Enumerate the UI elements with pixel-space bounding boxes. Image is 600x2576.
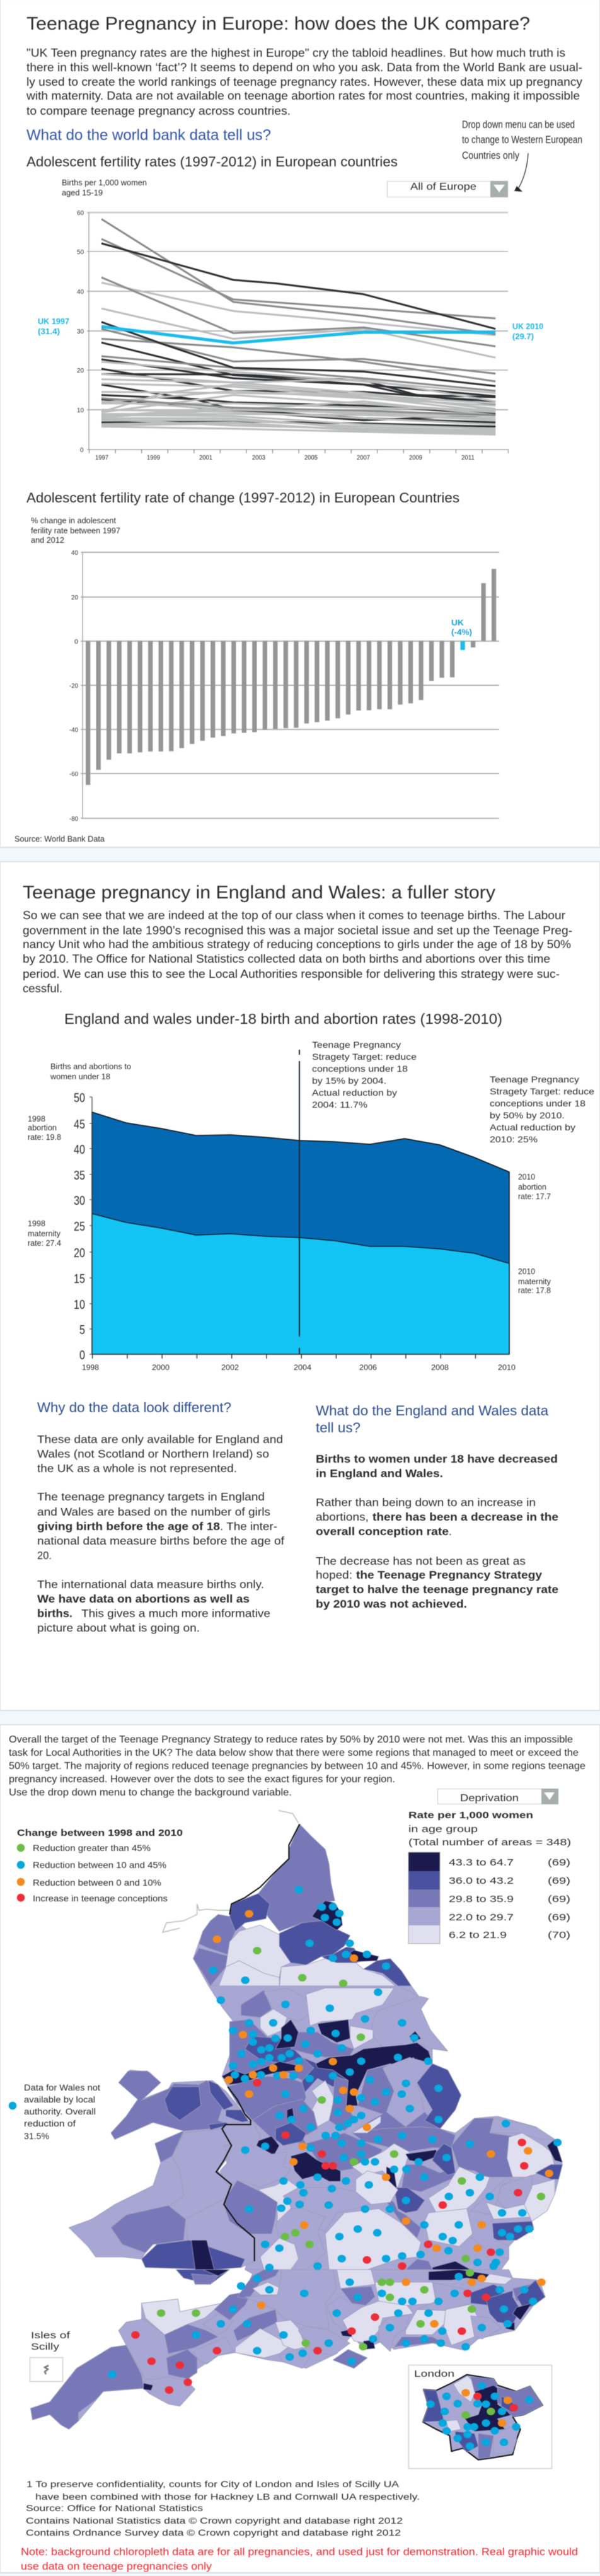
heading: world bank: What do the world bank data tell us? (26, 127, 271, 144)
callout: 2010 target: Actual reduction by (490, 1122, 575, 1132)
callout: 2010 target: by 50% by 2010. (490, 1110, 565, 1120)
panel: England and Wales (0, 861, 600, 2573)
dropdown: All of Europe (387, 181, 508, 197)
paragraphs: We have data on abortions as well as (37, 1593, 250, 1605)
legend: rate per 1,000 women: (69) (548, 1857, 570, 1868)
line chart: fertility rates (38, 178, 543, 461)
heading: line chart: Adolescent fertility rates (1997-2012) in European countries (26, 154, 398, 170)
callout: 2010 target: conceptions under 18 (490, 1098, 586, 1108)
column: what do the England and Wales data tell us (316, 1403, 558, 1610)
intro text: So we can see that we are indeed at the top of our class when it comes to teenage births. The Labour (23, 909, 565, 922)
paragraphs: in England and Wales. (316, 1467, 443, 1480)
label: UK 1997 (38, 316, 69, 336)
footnotes: Source: Office for National Statistics (26, 2503, 203, 2513)
footnotes: Contains National Statistics data © Crown copyright and database right 2012 (26, 2515, 403, 2526)
bar chart: rate of change: 40 (71, 550, 78, 557)
paragraphs: the UK as a whole is not represented. (37, 1462, 237, 1475)
legend: rate per 1,000 women: (69) (548, 1894, 570, 1905)
legend: rate per 1,000 women: (70) (548, 1930, 570, 1941)
area: maternity (92, 1214, 509, 1354)
intro text (26, 47, 582, 117)
bar chart: rate of change (31, 516, 499, 823)
bar chart: rate of change: -60 (69, 771, 78, 778)
paragraphs: giving birth before the age of 18 (37, 1520, 220, 1533)
paragraphs (37, 1433, 284, 1634)
label: UK 2010: (29.7) (512, 332, 534, 341)
footnotes: 1 To preserve confidentiality, counts for City of London and Isles of Scilly UA (26, 2479, 400, 2489)
dots: south (108, 2269, 546, 2394)
paragraphs: This gives a much more informative (81, 1607, 270, 1620)
bar chart: rate of change: -80 (69, 816, 78, 823)
legend: rate per 1,000 women: (69) (548, 1912, 570, 1923)
label: UK -4%: UK (451, 618, 464, 627)
legend: rate per 1,000 women: 22.0 to 29.7 (449, 1912, 514, 1923)
legend: rate per 1,000 women: in age group (408, 1824, 478, 1835)
label: 2010 maternity rate: rate: 17.8 (518, 1286, 551, 1295)
area chart: birth and abortion rates: 2010 (498, 1363, 516, 1372)
label: UK -4% (451, 618, 472, 637)
area chart: birth and abortion rates (28, 1040, 594, 1372)
footnotes: Contains Ordnance Survey data © Crown copyright and database right 2012 (26, 2527, 401, 2538)
note: data for Wales: reduction of (24, 2118, 76, 2128)
intro text (9, 1734, 586, 1798)
label: 2010 maternity rate: 2010 (518, 1267, 535, 1276)
dropdown: Deprivation (437, 1789, 558, 1804)
footnotes: have been combined with those for Hackney LB and Cornwall UA respectively. (35, 2492, 420, 2502)
intro text: by 2010. The Office for National Statistics collected data on both births and abortions over this time (23, 953, 550, 965)
paragraphs: and Wales are based on the number of girls (37, 1506, 270, 1518)
intro text: nancy Unit who had the ambitious strategy of reducing conceptions to girls under the age of 18 by 50% (23, 938, 571, 951)
legend: rate per 1,000 women: 29.8 to 35.9 (449, 1894, 514, 1905)
paragraphs: Wales (not Scotland or Northern Ireland) so (37, 1448, 269, 1460)
heading: area chart: England and wales under-18 birth and abortion rates (1998-2010) (64, 1011, 502, 1027)
note: demonstration data: Note: background chloropleth data are for all pregnancies, and used just for demonstration. Real graphic would (21, 2546, 578, 2558)
legend: rate per 1,000 women: (Total number of areas = 348) (408, 1837, 571, 1848)
area chart: birth and abortion rates: 2006 (359, 1363, 377, 1372)
legend: change between 1998 and 2010: Reduction between 10 and 45% (33, 1860, 166, 1870)
label: 1998 abortion rate: abortion (28, 1123, 57, 1132)
line chart: fertility rates: 2007 (357, 455, 370, 461)
callout: 2004 target: Actual reduction by (312, 1088, 397, 1098)
intro text: cessful. (23, 982, 62, 995)
heading (316, 1403, 549, 1436)
paragraphs: the Teenage Pregnancy Strategy (356, 1569, 542, 1581)
area chart: birth and abortion rates: women under 18 (50, 1072, 110, 1081)
area chart: birth and abortion rates: 25 (74, 1220, 85, 1234)
area chart: birth and abortion rates: 20 (74, 1246, 85, 1260)
label: 1998 maternity rate: rate: 27.4 (28, 1239, 61, 1248)
callout: 2010 target: 2010: 25% (490, 1134, 538, 1144)
callout: 2004 target: Teenage Pregnancy (312, 1040, 401, 1050)
area chart: birth and abortion rates: 5 (79, 1323, 85, 1337)
area chart: birth and abortion rates: 35 (74, 1169, 85, 1183)
heading: tell us? (316, 1420, 361, 1436)
note: data for Wales (9, 2082, 100, 2141)
line chart: fertility rates: 50 (77, 249, 84, 256)
note: demonstration data: use data on teenage pregnancies only (21, 2560, 212, 2572)
line chart: fertility rates: Births per 1,000 women (62, 178, 147, 187)
line chart: fertility rates: 2009 (409, 455, 422, 461)
panel: Teenage Pregnancy in Europe (0, 0, 600, 848)
legend: rate per 1,000 women: Rate per 1,000 women (408, 1810, 533, 1821)
intro text: there in this well-known ‘fact’? It seems to depend on who you ask. Data from the World Bank are usual- (26, 61, 582, 74)
paragraphs: national data measure births before the age of (37, 1535, 284, 1547)
heading: What do the England and Wales data (316, 1403, 549, 1419)
label: UK 2010: UK 2010 (512, 322, 543, 331)
bar chart: rate of change: % change in adolescent (31, 516, 117, 525)
callout: 2004 target: conceptions under 18 (312, 1064, 408, 1074)
area chart: birth and abortion rates: Births and abortions to (50, 1062, 131, 1071)
callout: 2010 target: Stragety Target: reduce (490, 1086, 594, 1096)
area chart: birth and abortion rates: 2000 (152, 1363, 170, 1372)
paragraphs: there has been a decrease in the (372, 1511, 558, 1523)
callout: 2004 target: Stragety Target: reduce (312, 1052, 417, 1062)
area chart: birth and abortion rates: 50 (74, 1091, 85, 1105)
intro text (23, 909, 572, 995)
annotation: drop down note: Countries only (462, 149, 519, 161)
intro text: "UK Teen pregnancy rates are the highest in Europe" cry the tabloid headlines. But how much truth is (26, 47, 565, 59)
note: data for Wales: available by local (24, 2094, 95, 2104)
line chart: fertility rates: 10 (77, 407, 84, 414)
legend: rate per 1,000 women: 36.0 to 43.2 (449, 1876, 514, 1886)
paragraphs: abortions, (316, 1511, 369, 1523)
label: 2010 abortion rate: 2010 (518, 1173, 535, 1181)
panel: map (0, 1724, 600, 2573)
callout: 2004 target: by 15% by 2004. (312, 1076, 386, 1086)
area chart: birth and abortion rates: 15 (74, 1272, 85, 1286)
heading: Why do the data look different? (37, 1400, 231, 1415)
legend: rate per 1,000 women: (69) (548, 1876, 570, 1886)
line chart: fertility rates: 60 (77, 210, 84, 217)
column: why do the data look different (37, 1400, 284, 1634)
note: data for Wales: 31.5% (24, 2131, 49, 2141)
legend: change between 1998 and 2010 (17, 1828, 183, 1903)
paragraphs: The international data measure births only. (37, 1578, 264, 1591)
paragraphs: . (449, 1525, 452, 1538)
bar chart: rate of change: -40 (69, 727, 78, 734)
inset: Isles of Scilly: Isles of (31, 2330, 71, 2341)
label: UK 1997: (31.4) (38, 327, 60, 336)
paragraphs: births. (37, 1607, 72, 1620)
legend: change between 1998 and 2010: Reduction greater than 45% (33, 1843, 151, 1853)
line chart: fertility rates: 20 (77, 368, 84, 374)
intro text: 50% target. The majority of regions reduced teenage pregnancies by between 10 and 45%. However, in some regions teenage (9, 1761, 586, 1772)
label: 2010 abortion rate (518, 1173, 551, 1201)
label: 2010 abortion rate: abortion (518, 1183, 546, 1192)
label: 1998 abortion rate: 1998 (28, 1115, 45, 1123)
line chart: fertility rates: 30 (77, 328, 84, 335)
paragraphs: . The inter- (220, 1520, 277, 1533)
dots: midlands and east (217, 1988, 562, 2271)
inset: London: London (414, 2369, 454, 2379)
legend: rate per 1,000 women: 6.2 to 21.9 (449, 1930, 507, 1941)
area: abortions (92, 1112, 509, 1354)
label: 1998 maternity rate (28, 1219, 61, 1248)
inset: Isles of Scilly: Scilly (31, 2341, 60, 2352)
label: 1998 abortion rate: rate: 19.8 (28, 1133, 61, 1142)
paragraphs: Births to women under 18 have decreased (316, 1453, 558, 1465)
area chart: birth and abortion rates: 2008 (431, 1363, 449, 1372)
label: 1998 abortion rate (28, 1115, 61, 1142)
area chart: birth and abortion rates: 2004 (294, 1363, 311, 1372)
note: data for Wales: Data for Wales not (24, 2082, 100, 2092)
area chart: birth and abortion rates: 2002 (221, 1363, 239, 1372)
legend: change between 1998 and 2010: Increase in teenage conceptions (33, 1893, 168, 1903)
regions: south (31, 2270, 545, 2429)
intro text: ly used to create the world rankings of teenage pregnancy rates. However, these data mix up pregnancy (26, 76, 582, 88)
legend: change between 1998 and 2010: Change between 1998 and 2010 (17, 1828, 183, 1838)
label: UK 1997: UK 1997 (38, 316, 69, 326)
intro text: task for Local Authorities in the UK? The data below show that there were some regions that managed to meet or exceed the (9, 1748, 579, 1758)
callout: 2004 target (312, 1040, 417, 1110)
paragraphs: picture about what is going on. (37, 1622, 200, 1634)
dots: London (426, 2382, 533, 2450)
line chart: fertility rates: 40 (77, 289, 84, 296)
paragraphs (316, 1453, 558, 1610)
paragraphs: overall conception rate (316, 1525, 449, 1538)
bar chart: rate of change: 20 (71, 595, 78, 601)
title: Teenage Pregnancy in Europe: how does the UK compare? (26, 14, 530, 34)
intro text: with maternity. Data are not available on teenage abortion rates for most countries, making it impossible (26, 90, 580, 102)
heading: fuller story: Teenage pregnancy in England and Wales: a fuller story (23, 883, 496, 903)
label: 2010 maternity rate: maternity (518, 1277, 551, 1286)
legend: rate per 1,000 women: 43.3 to 64.7 (449, 1857, 514, 1868)
line chart: fertility rates: 2005 (304, 455, 318, 461)
annotation: drop down note (462, 119, 582, 161)
regions: northern England (163, 1811, 419, 1997)
label: 2010 abortion rate: rate: 17.7 (518, 1192, 551, 1201)
line chart: fertility rates: aged 15-19 (62, 189, 103, 197)
dropdown: All of Europe: All of Europe (410, 182, 476, 192)
callout: 2010 target: Teenage Pregnancy (490, 1074, 579, 1084)
intro text: government in the late 1990’s recognised this was a major societal issue and set up the Teenage Preg- (23, 924, 572, 937)
label: 1998 maternity rate: maternity (28, 1229, 61, 1238)
paragraphs: by 2010 was not achieved. (316, 1598, 467, 1610)
paragraphs: These data are only available for England and (37, 1433, 283, 1446)
legend: rate per 1,000 women (408, 1810, 571, 1944)
note: data for Wales: authority. Overall (24, 2106, 96, 2116)
line chart: fertility rates: 2003 (252, 455, 265, 461)
bar chart: rate of change: ferility rate between 1997 (31, 526, 120, 535)
line chart: fertility rates: 1997 (95, 455, 108, 461)
inset: London (408, 2365, 552, 2469)
UK highlight line (101, 327, 495, 343)
heading: bar chart: Adolescent fertility rate of change (1997-2012) in European Countries (26, 490, 459, 506)
label: 1998 maternity rate: 1998 (28, 1219, 45, 1228)
choropleth map: England and Wales (31, 1811, 562, 2429)
arrow: drop down note to menu (514, 153, 528, 192)
area chart: birth and abortion rates: 0 (79, 1349, 85, 1362)
footnotes (26, 2479, 420, 2538)
area chart: birth and abortion rates: 10 (74, 1298, 85, 1312)
intro text: to compare teenage pregnancy across countries. (26, 105, 291, 117)
area chart: birth and abortion rates: 30 (74, 1194, 85, 1208)
callout: 2004 target: 2004: 11.7% (312, 1099, 367, 1110)
marker: 2004 target line (299, 1050, 300, 1354)
intro text: Overall the target of the Teenage Pregnancy Strategy to reduce rates by 50% by 2010 were not met. Was this an impossible (9, 1734, 573, 1745)
bar chart: rate of change: -20 (69, 683, 78, 690)
dropdown: Deprivation: Deprivation (460, 1793, 519, 1804)
paragraphs: Rather than being down to an increase in (316, 1496, 536, 1509)
legend: change between 1998 and 2010: Reduction between 0 and 10% (33, 1877, 161, 1888)
area chart: birth and abortion rates: 45 (74, 1118, 85, 1132)
line chart: fertility rates: 2011 (461, 455, 475, 461)
paragraphs: The decrease has not been as great as (316, 1555, 526, 1567)
area chart: birth and abortion rates: 40 (74, 1143, 85, 1157)
source note: Source: World Bank Data (14, 834, 105, 844)
paragraphs: 20. (37, 1549, 52, 1562)
regions: midlands, Wales and east (69, 1986, 562, 2271)
paragraphs: hoped: (316, 1569, 352, 1581)
dots: north (209, 1886, 390, 1987)
label: UK 2010 (512, 322, 543, 341)
callout: 2010 target (490, 1074, 594, 1144)
paragraphs: target to halve the teenage pregnancy rate (316, 1583, 558, 1596)
label: 2010 maternity rate (518, 1267, 551, 1295)
bar chart: rate of change: and 2012 (31, 536, 64, 545)
line chart: fertility rates: 2001 (199, 455, 212, 461)
line chart: fertility rates: 0 (80, 447, 84, 454)
intro text: period. We can use this to see the Local Authorities responsible for delivering this strategy were suc- (23, 968, 560, 980)
label: UK -4%: (-4%) (451, 627, 472, 637)
paragraphs: The teenage pregnancy targets in England (37, 1490, 265, 1503)
intro text: Use the drop down menu to change the background variable. (9, 1787, 292, 1798)
inset: Isles of Scilly (30, 2330, 71, 2382)
area chart: birth and abortion rates: 1998 (82, 1363, 99, 1372)
note: demonstration data (21, 2546, 578, 2572)
bar chart: rate of change: 0 (74, 639, 78, 646)
intro text: pregnancy increased. However over the dots to see the exact figures for your region. (9, 1774, 395, 1785)
line chart: fertility rates: 1999 (147, 455, 160, 461)
